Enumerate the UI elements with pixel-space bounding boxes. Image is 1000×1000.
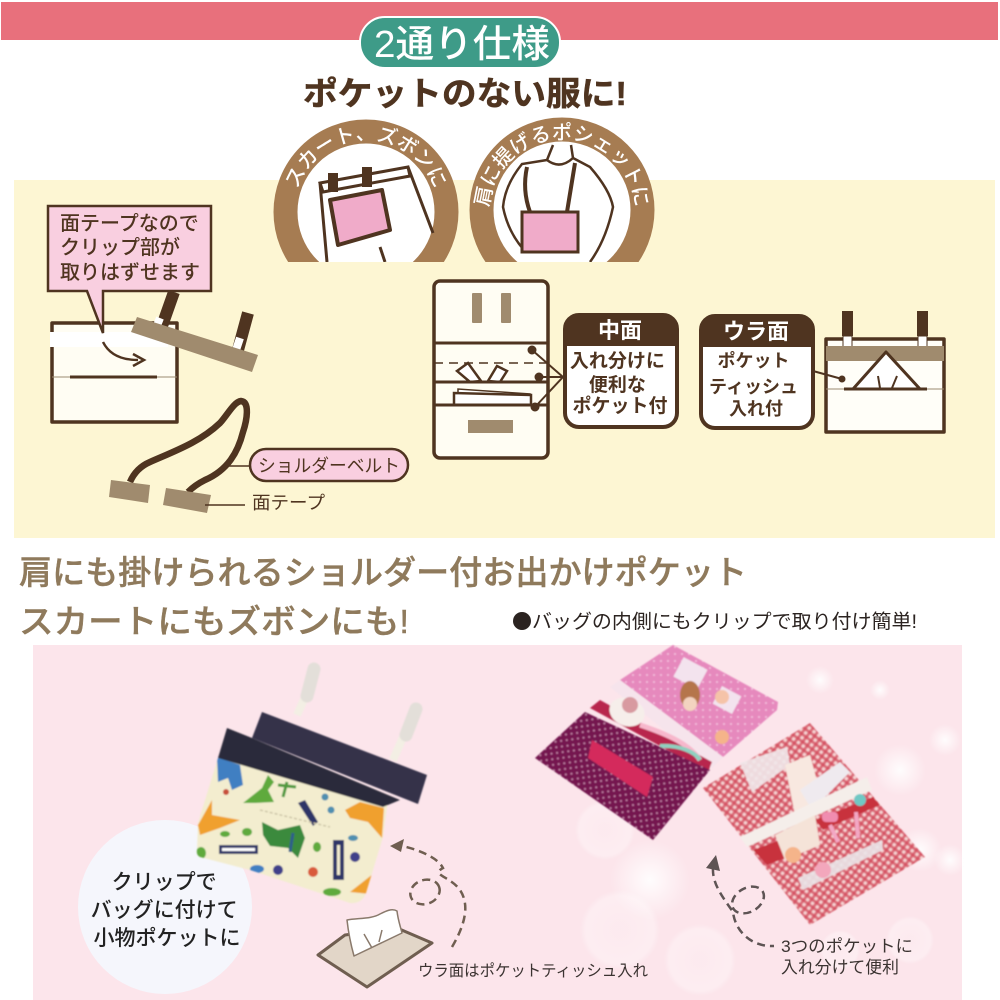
illustration: back of pocket with tissue bbox=[813, 311, 944, 432]
label box: 中面 bbox=[565, 315, 677, 427]
top pink band bbox=[1, 2, 998, 40]
heading: ポケットのない服に!: ポケットのない服に! bbox=[303, 75, 627, 112]
badge: 2通り仕様: 2通り仕様 bbox=[374, 24, 550, 66]
photo: dinosaur pocket bbox=[190, 669, 427, 910]
illustration: detachable clip pocket bbox=[50, 292, 258, 422]
note: バッグの内側にも: バッグの内側にもクリップで取り付け簡単! bbox=[532, 611, 917, 633]
illustration: shoulder belt bbox=[109, 401, 247, 513]
label box: 中面: 中面 bbox=[598, 318, 642, 343]
caption: 3つのポケットに入れ分けて便利: 入れ分けて便利 bbox=[781, 958, 899, 977]
label box: ウラ面 bbox=[701, 316, 813, 428]
callout: 面テープなのでクリップ部が取りはずせます: 取りはずせます bbox=[60, 261, 200, 284]
label box: 中面: 入れ分けに bbox=[570, 350, 665, 372]
caption: ウラ面はポケットティッシュ入れ: ウラ面はポケットティッシュ入れ bbox=[418, 962, 648, 980]
callout: 面テープなのでクリップ部が取りはずせます: クリップ部が bbox=[60, 236, 180, 259]
bokeh sparkles bbox=[575, 666, 966, 996]
label box: ウラ面: 入れ付 bbox=[729, 399, 783, 419]
label box: ウラ面: ポケット bbox=[717, 350, 789, 371]
label: ショルダーベルト: ショルダーベルト bbox=[258, 456, 400, 476]
panel: yellow instructions background bbox=[14, 180, 995, 538]
heading: 肩にも掛けられるショルダー付お出かけポケット: 肩にも掛けられるショルダー付お出かけポケット bbox=[19, 554, 747, 591]
pointers from pockets to 中面 box bbox=[528, 346, 563, 410]
badge: shoulder pochette ring: 肩に提げるポシェットに bbox=[473, 122, 648, 207]
illustration: inside of open pocket bbox=[434, 281, 548, 458]
callout: white circle クリップでバッグに付けて小物ポケットに bbox=[78, 820, 252, 994]
label: 面テープ bbox=[205, 493, 325, 513]
label: ショルダーベルト bbox=[227, 449, 408, 481]
badge: skirt and trousers ring bbox=[274, 120, 458, 262]
callout: white circle クリップでバッグに付けて小物ポケットに: バッグに付けて bbox=[91, 899, 238, 922]
arrow: dashed gingham loop bbox=[706, 855, 774, 946]
arrow: dashed tissue loop bbox=[390, 839, 465, 947]
icon: tissue pack bbox=[318, 910, 432, 987]
label box: ウラ面: ティッシュ bbox=[709, 377, 798, 397]
label box: ウラ面: ウラ面 bbox=[723, 319, 789, 344]
photo: gingham open pocket bbox=[703, 723, 925, 925]
callout: 面テープなのでクリップ部が取りはずせます: 面テープなので bbox=[60, 212, 199, 235]
caption: 3つのポケットに入れ分けて便利: 3つのポケットに bbox=[781, 937, 913, 956]
photo: purple open pocket bbox=[535, 645, 778, 840]
heading: スカートにもズボンにも!: スカートにもズボンにも! bbox=[19, 603, 409, 640]
callout: 面テープなのでクリップ部が取りはずせます bbox=[48, 206, 211, 333]
badge: skirt and trousers ring: スカート、ズボンに bbox=[286, 128, 446, 188]
label box: 中面: ポケット付 bbox=[572, 394, 668, 417]
callout: white circle クリップでバッグに付けて小物ポケットに: クリップで bbox=[112, 871, 217, 894]
label: 面テープ: 面テープ bbox=[252, 493, 325, 513]
panel: pink photo background bbox=[33, 645, 962, 1000]
label box: 中面: 便利な bbox=[589, 374, 646, 396]
badge: shoulder pochette ring bbox=[470, 118, 654, 262]
callout: white circle クリップでバッグに付けて小物ポケットに: 小物ポケットに bbox=[94, 927, 240, 950]
